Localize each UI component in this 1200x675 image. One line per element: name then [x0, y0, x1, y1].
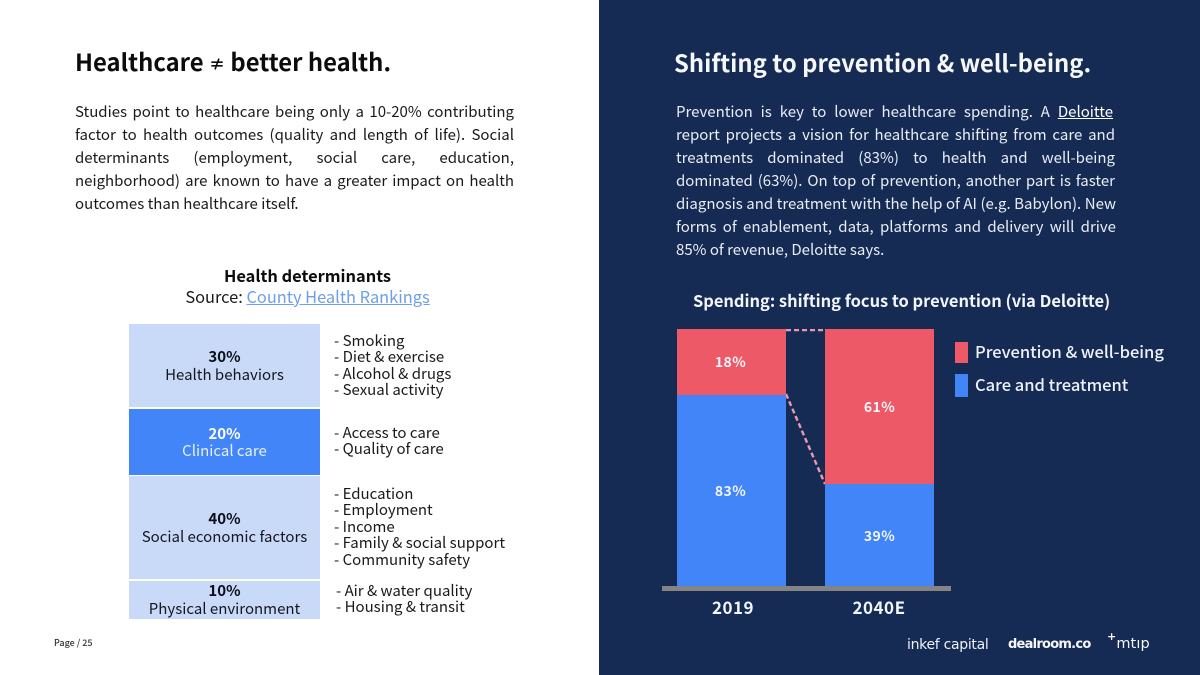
row: physical environment: Physical environment [149, 598, 300, 618]
text block: prevention: 85% of revenue, Deloitte says. [676, 239, 884, 260]
axis baseline [662, 586, 951, 591]
row: physical environment: 10% [208, 580, 241, 601]
text block: healthcare contribution: outcomes than healthcare itself. [75, 193, 299, 214]
row: social economic factors: 40% [208, 508, 241, 529]
text block: prevention: dominated (63%). On top of prevention, another part is faster [676, 170, 1115, 191]
swatch: prevention [955, 342, 968, 363]
text block: prevention: Prevention is key to lower healthcare spending. A Deloitte [676, 101, 1113, 122]
panel: left white background [0, 0, 599, 675]
legend [955, 339, 1164, 397]
heading: shifting to prevention: Shifting to prevention & well-being. [674, 44, 1091, 79]
bar 2019: prevention: 18% [715, 352, 746, 372]
row: health behaviors: 30% [208, 346, 241, 367]
heading: health determinants [185, 263, 430, 308]
list: physical environment factors: - Air & water quality [336, 580, 472, 601]
page number: Page / 25 [54, 636, 93, 649]
connector lines [786, 329, 825, 484]
chart title: Spending: shifting focus to prevention (via Deloitte) [693, 288, 1110, 312]
text block: prevention: report projects a vision for healthcare shifting from care and [676, 124, 1115, 145]
bar 2040E: care [825, 484, 934, 586]
bar 2040E: care: 39% [864, 526, 895, 546]
row: social economic factors: Social economic factors [142, 526, 307, 546]
text block: prevention: diagnosis and treatment with the help of AI (e.g. Babylon). New [676, 193, 1116, 214]
row: social economic factors [129, 476, 320, 579]
row: clinical care: 20% [208, 423, 241, 444]
label 2019: 2019 [712, 594, 754, 619]
list: health behaviors factors: - Sexual activity [334, 379, 443, 400]
list: social economic factors list: - Education [334, 483, 413, 504]
list: social economic factors list: - Employment [334, 499, 433, 520]
legend label: prevention: Prevention & well-being [975, 339, 1164, 363]
row: health behaviors: Health behaviors [165, 364, 284, 384]
text block: healthcare contribution: neighborhood) are known to have a greater impact on health [75, 170, 514, 191]
list: social economic factors list: - Income [334, 516, 395, 537]
bar 2040E: prevention: 61% [864, 397, 895, 417]
list: physical environment factors [336, 580, 472, 617]
list: social economic factors list: - Family & social support [334, 532, 505, 553]
logo: dealroom.co: dealroom.co [1008, 637, 1090, 652]
text block: healthcare contribution [75, 101, 514, 214]
list: clinical care factors: - Access to care [334, 422, 440, 443]
label 2040E: 2040E [852, 594, 906, 619]
list: health behaviors factors: - Alcohol & drugs [334, 363, 451, 384]
row: clinical care [129, 409, 320, 475]
list: health behaviors factors: - Smoking [334, 330, 405, 351]
stacked bar chart [662, 329, 951, 619]
text block: healthcare contribution: Studies point to healthcare being only a 10-20% contributing [75, 101, 514, 122]
table: health determinants [129, 324, 505, 619]
list: social economic factors list: - Community safety [334, 549, 470, 570]
list: clinical care factors [334, 422, 444, 459]
logo: mtip: +mtıp [1107, 630, 1150, 652]
row: health behaviors [129, 324, 320, 407]
bar 2019: prevention [677, 329, 786, 395]
heading: health determinants: Source: County Health Rankings [185, 284, 430, 308]
list: physical environment factors: - Housing & transit [336, 596, 465, 617]
text block: prevention [676, 101, 1116, 260]
panel: right navy background [599, 0, 1200, 675]
heading: Healthcare is not better health: Healthcare ≠ better health. [75, 43, 391, 78]
bar 2019: care [677, 395, 786, 586]
row: clinical care: Clinical care [182, 440, 267, 461]
text block: healthcare contribution: determinants (employment, social care, education, [75, 147, 514, 168]
text block: prevention: treatments dominated (83%) to health and well-being [676, 147, 1115, 168]
heading: health determinants: Health determinants [224, 263, 391, 287]
legend label: care: Care and treatment [975, 372, 1128, 396]
text block: healthcare contribution: factor to health outcomes (quality and length of life). Social [75, 124, 514, 145]
list: health behaviors factors [334, 330, 451, 400]
row: physical environment [129, 581, 320, 619]
swatch: care [955, 374, 968, 397]
list: clinical care factors: - Quality of care [334, 438, 444, 459]
list: social economic factors list [334, 483, 505, 570]
text block: prevention: forms of enablement, data, platforms and delivery will drive [676, 216, 1116, 237]
bar 2040E: prevention [825, 329, 934, 484]
list: health behaviors factors: - Diet & exercise [334, 346, 444, 367]
bar 2019: care: 83% [715, 481, 746, 501]
logo: inkef capital: inkef capital [907, 637, 988, 653]
